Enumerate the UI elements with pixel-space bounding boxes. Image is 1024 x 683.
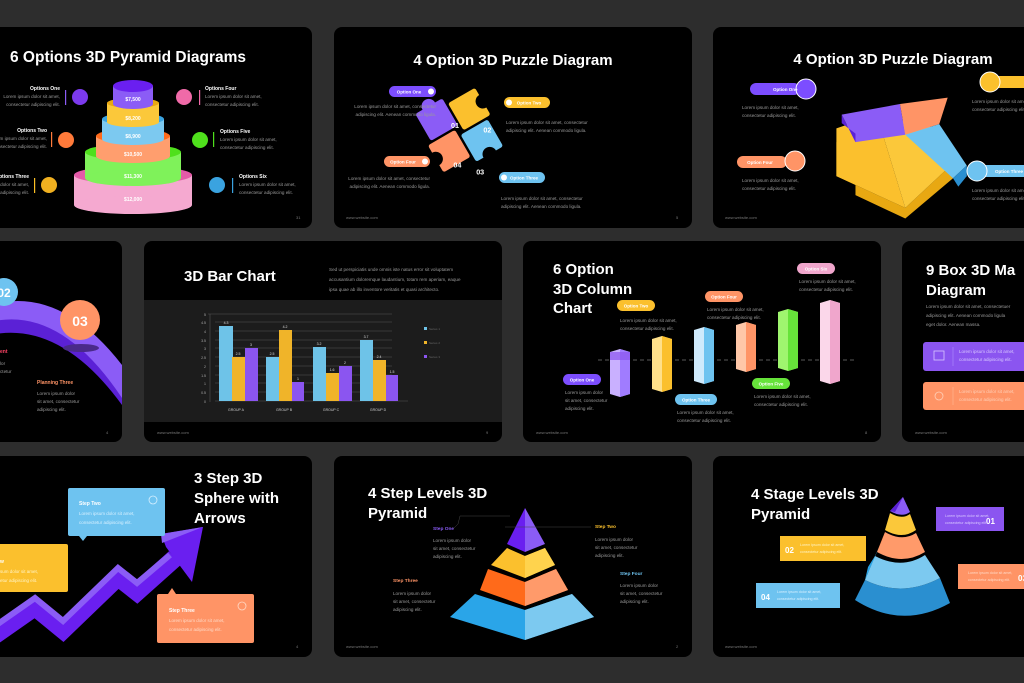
options right: consectetur adipiscing elit. bbox=[205, 102, 259, 107]
bar chart: 3.7 bbox=[364, 335, 368, 339]
option three bbox=[499, 172, 583, 209]
slide: 4 step pyramid: 2 bbox=[676, 644, 679, 649]
option labels: Option Six bbox=[805, 266, 828, 272]
description: eget dolor. Aenean massa. bbox=[926, 322, 980, 327]
title: Pyramid bbox=[368, 505, 427, 522]
option three: Option Three bbox=[995, 169, 1023, 174]
purple box: Lorem ipsum dolor sit amet, bbox=[959, 349, 1015, 354]
step labels: sit amet, consectetur bbox=[393, 599, 436, 604]
step two callout bbox=[68, 488, 165, 541]
slide: 9 box matrix bbox=[902, 241, 1024, 442]
options left: Options One bbox=[30, 86, 60, 92]
title bbox=[926, 262, 1016, 299]
slide: 3 step arrows bbox=[0, 456, 312, 657]
stage boxes (behind): Lorem ipsum dolor sit amet, bbox=[945, 514, 989, 518]
puzzle pieces: 03 bbox=[476, 168, 484, 177]
bar chart: 1.5 bbox=[390, 370, 394, 374]
step three callout: Lorem ipsum dolor sit amet, bbox=[169, 618, 225, 623]
title: 4 Stage Levels 3D bbox=[751, 486, 879, 503]
options left: dolor sit amet, bbox=[0, 182, 29, 187]
description bbox=[329, 267, 461, 292]
option two: adipiscing elit. Aenean commodo ligula. bbox=[506, 128, 586, 133]
options left: consectetur adipiscing elit. bbox=[6, 102, 60, 107]
title: 3D Bar Chart bbox=[184, 268, 276, 285]
slide: 4 stage cone pyramid: www.website.com bbox=[725, 644, 757, 649]
option one: consectetur adipiscing elit. bbox=[742, 113, 796, 118]
cylinder pyramid: $10,500 bbox=[124, 152, 142, 158]
stage boxes (behind): 01 bbox=[986, 517, 995, 526]
title: 4 Option 3D Puzzle Diagram bbox=[793, 51, 993, 68]
description bbox=[926, 304, 1011, 327]
bar chart: 4.3 bbox=[224, 321, 228, 325]
legend: Series 2 bbox=[429, 341, 440, 345]
slide: 3D bar chart bbox=[144, 241, 502, 442]
slide: 6 option column chart: www.website.com bbox=[536, 430, 568, 435]
slide: 6 options pyramid bbox=[0, 27, 312, 228]
step labels: adipiscing elit. bbox=[393, 607, 422, 612]
step labels: Step Three bbox=[393, 578, 418, 584]
title bbox=[368, 485, 487, 522]
options left bbox=[0, 86, 88, 195]
step labels: adipiscing elit. bbox=[433, 554, 462, 559]
bar chart: 0 bbox=[204, 400, 206, 404]
stage boxes (behind): 02 bbox=[785, 546, 794, 555]
option four bbox=[737, 151, 805, 191]
bar chart: 3 bbox=[204, 347, 206, 351]
option labels: consectetur adipiscing elit. bbox=[677, 418, 731, 423]
slide: 4 option puzzle: 5 bbox=[676, 215, 679, 220]
cylinder pyramid: $11,300 bbox=[124, 174, 142, 180]
step two callout: consectetur adipiscing elit. bbox=[79, 520, 132, 525]
planning text: adipiscing elit. bbox=[37, 407, 66, 412]
step two callout: Step Two bbox=[79, 501, 101, 507]
stage boxes (behind): 04 bbox=[761, 593, 770, 602]
title bbox=[553, 261, 632, 317]
description: ipsa quae ab illo inventore veritatis et quasi architecto. bbox=[329, 287, 439, 292]
title: 6 Options 3D Pyramid Diagrams bbox=[10, 49, 246, 66]
options right: Options Six bbox=[239, 174, 267, 180]
slide: 6 option column chart: 8 bbox=[865, 430, 868, 435]
columns bbox=[610, 300, 840, 397]
bar chart: 4.5 bbox=[201, 321, 206, 325]
stage boxes (behind): Lorem ipsum dolor sit amet, bbox=[800, 543, 844, 547]
option three: Option Three bbox=[510, 176, 538, 180]
option one: Lorem ipsum dolor sit amet, bbox=[742, 105, 799, 110]
option labels: Option Five bbox=[759, 382, 784, 386]
slide: 3D bar chart: www.website.com bbox=[157, 430, 189, 435]
stage boxes (behind): consectetur adipiscing elit. bbox=[968, 578, 1010, 582]
option labels: Lorem ipsum dolor sit amet, bbox=[620, 318, 677, 323]
legend: Series 3 bbox=[429, 355, 440, 359]
step labels: adipiscing elit. bbox=[595, 553, 624, 558]
cylinder pyramid bbox=[74, 80, 192, 214]
step labels: Lorem ipsum dolor bbox=[620, 583, 659, 588]
bar chart: 2.5 bbox=[270, 352, 274, 356]
slide: 6 option column chart bbox=[523, 241, 881, 442]
arc band bbox=[0, 315, 122, 405]
stage boxes (behind): consectetur adipiscing elit. bbox=[777, 597, 819, 601]
title bbox=[751, 486, 879, 523]
legend bbox=[424, 327, 440, 359]
options left: Lorem ipsum dolor sit amet, bbox=[3, 94, 60, 99]
bar chart: 2.5 bbox=[201, 356, 206, 360]
option three: Lorem ipsum dolor sit amet, consectetur bbox=[501, 196, 583, 201]
bar chart: 2 bbox=[344, 361, 346, 365]
step labels: Step Four bbox=[620, 571, 643, 577]
planning text: ctetur bbox=[0, 369, 12, 374]
option labels: Lorem ipsum dolor sit amet, bbox=[754, 394, 811, 399]
step one callout: sum dolor sit amet, bbox=[0, 569, 38, 574]
bar chart: 5 bbox=[204, 313, 206, 317]
option one bbox=[354, 86, 436, 117]
circle 03: 03 bbox=[72, 313, 88, 329]
step one callout: w bbox=[0, 559, 4, 565]
option one: Option One bbox=[397, 90, 422, 94]
option three bbox=[967, 161, 1024, 201]
option four: Lorem ipsum dolor sit amet, consectetur bbox=[348, 176, 430, 181]
title: 4 Option 3D Puzzle Diagram bbox=[413, 52, 613, 69]
house puzzle bbox=[836, 98, 967, 218]
option labels: Option Four bbox=[711, 294, 737, 300]
step labels: adipiscing elit. bbox=[620, 599, 649, 604]
step one callout: etur adipiscing elit. bbox=[0, 578, 37, 583]
slide: 4 option puzzle: www.website.com bbox=[346, 215, 378, 220]
cylinder pyramid: $8,900 bbox=[125, 134, 141, 140]
step two callout: Lorem ipsum dolor sit amet, bbox=[79, 511, 135, 516]
slide: planning arc: 4 bbox=[106, 430, 109, 435]
orange box bbox=[923, 382, 1024, 410]
bar chart: 1 bbox=[297, 377, 299, 381]
step three callout: consectetur adipiscing elit. bbox=[169, 627, 222, 632]
options right: Lorem ipsum dolor sit amet, bbox=[205, 94, 262, 99]
slide: 4 option puzzle bbox=[334, 27, 692, 228]
legend: Series 1 bbox=[429, 327, 440, 331]
step labels: Lorem ipsum dolor bbox=[595, 537, 634, 542]
slide: 3 step arrows: 4 bbox=[296, 644, 299, 649]
option labels: Option One bbox=[570, 378, 595, 382]
title: Sphere with bbox=[194, 490, 279, 507]
option four: Option Four bbox=[390, 160, 416, 164]
option labels: Lorem ipsum dolor sit amet, bbox=[677, 410, 734, 415]
options right: Lorem ipsum dolor sit amet, bbox=[220, 137, 277, 142]
bar chart: GROUP B bbox=[276, 408, 293, 412]
step labels: Step Two bbox=[595, 524, 616, 530]
title: Arrows bbox=[194, 510, 246, 527]
stage boxes (behind): Lorem ipsum dolor sit amet, bbox=[968, 571, 1012, 575]
option labels: consectetur adipiscing elit. bbox=[620, 326, 674, 331]
bar chart: 2.4 bbox=[377, 355, 381, 359]
slide: 4 step pyramid: www.website.com bbox=[346, 644, 378, 649]
option labels: Lorem ipsum dolor sit amet, bbox=[799, 279, 856, 284]
option labels: Option Three bbox=[682, 398, 710, 402]
bar chart: 1.6 bbox=[330, 368, 334, 372]
option four: consectetur adipiscing elit. bbox=[742, 186, 796, 191]
puzzle pieces: 01 bbox=[451, 121, 459, 130]
purple box bbox=[923, 342, 1024, 371]
options left: adipiscing elit. bbox=[0, 190, 29, 195]
title: 6 Option bbox=[553, 261, 614, 278]
circle 02 bbox=[0, 278, 18, 306]
bar chart: GROUP C bbox=[323, 408, 340, 412]
stage boxes (behind): Lorem ipsum dolor sit amet, bbox=[777, 590, 821, 594]
option labels: consectetur adipiscing elit. bbox=[799, 287, 853, 292]
cone bbox=[855, 497, 950, 616]
stage boxes (behind): consectetur adipiscing elit. bbox=[945, 521, 987, 525]
slide: 4 stage cone pyramid bbox=[713, 456, 1024, 657]
slide: 4 step pyramid bbox=[334, 456, 692, 657]
pyramid bbox=[450, 508, 594, 640]
bar chart: 4 bbox=[204, 330, 206, 334]
option labels: sit amet, consectetur bbox=[565, 398, 608, 403]
cylinder pyramid: $7,500 bbox=[125, 97, 141, 103]
bar chart: 0.5 bbox=[201, 391, 206, 395]
step labels: Lorem ipsum dolor bbox=[433, 538, 472, 543]
step labels: sit amet, consectetur bbox=[595, 545, 638, 550]
option labels: Option Two bbox=[624, 304, 648, 308]
slide: planning arc bbox=[0, 241, 122, 442]
option four: Option Four bbox=[747, 160, 773, 165]
orange box: consectetur adipiscing elit. bbox=[959, 397, 1012, 402]
bar chart: 2 bbox=[204, 365, 206, 369]
bar chart: GROUP D bbox=[370, 408, 387, 412]
slide: 6 options pyramid: 31 bbox=[296, 215, 301, 220]
options right: Lorem ipsum dolor sit amet, bbox=[239, 182, 296, 187]
option labels: consectetur adipiscing elit. bbox=[754, 402, 808, 407]
description: accusantium doloremque laudantium, totam rem aperiam, eaque bbox=[329, 277, 461, 282]
circle 03 bbox=[60, 300, 100, 352]
step labels bbox=[393, 516, 663, 612]
option one: Lorem ipsum dolor sit amet, consectetur bbox=[354, 104, 436, 109]
title: Diagram bbox=[926, 282, 986, 299]
option two bbox=[504, 97, 588, 133]
slide: 9 box matrix: www.website.com bbox=[915, 430, 947, 435]
planning text: ent bbox=[0, 349, 8, 355]
cylinder pyramid: $12,000 bbox=[124, 197, 142, 203]
purple box: consectetur adipiscing elit. bbox=[959, 357, 1012, 362]
option two bbox=[972, 72, 1024, 112]
bar chart: 3.5 bbox=[201, 339, 206, 343]
bar chart: GROUP A bbox=[228, 408, 245, 412]
bar chart bbox=[201, 313, 408, 412]
step one callout bbox=[0, 544, 68, 592]
option labels: adipiscing elit. bbox=[565, 406, 594, 411]
step labels: sit amet, consectetur bbox=[433, 546, 476, 551]
options right: Options Five bbox=[220, 129, 250, 135]
orange box: Lorem ipsum dolor sit amet, bbox=[959, 389, 1015, 394]
option labels: consectetur adipiscing elit. bbox=[707, 315, 761, 320]
stage boxes (behind): consectetur adipiscing elit. bbox=[800, 550, 842, 554]
option two: Lorem ipsum dolor sit amet, consectetur bbox=[506, 120, 588, 125]
option four: Lorem ipsum dolor sit amet, bbox=[742, 178, 799, 183]
option labels: Lorem ipsum dolor sit amet, bbox=[707, 307, 764, 312]
title bbox=[194, 470, 279, 527]
description: Lorem ipsum dolor sit amet, consectetuer bbox=[926, 304, 1011, 309]
description: adipiscing elit. Aenean commodo ligula bbox=[926, 313, 1006, 318]
bar chart: 3.2 bbox=[317, 342, 321, 346]
title: 3D Column bbox=[553, 281, 632, 298]
bar chart: 2.5 bbox=[236, 352, 240, 356]
planning text: Lorem ipsum dolor bbox=[37, 391, 76, 396]
step labels: Lorem ipsum dolor bbox=[393, 591, 432, 596]
bar chart: 1 bbox=[204, 382, 206, 386]
step three callout bbox=[157, 588, 254, 643]
slide: puzzle house: www.website.com bbox=[725, 215, 757, 220]
puzzle pieces: 04 bbox=[453, 160, 461, 169]
puzzle pieces bbox=[401, 72, 517, 189]
title: Pyramid bbox=[751, 506, 810, 523]
bar chart: 3 bbox=[250, 343, 252, 347]
bar chart: 1.5 bbox=[201, 374, 206, 378]
step labels: Step One bbox=[433, 526, 454, 532]
title: 9 Box 3D Ma bbox=[926, 262, 1016, 279]
description: Sed ut perspiciatis unde omnis iste natus error sit voluptatem bbox=[329, 267, 453, 272]
planning text: lor bbox=[0, 361, 6, 366]
step labels: sit amet, consectetur bbox=[620, 591, 663, 596]
option one: Option One bbox=[773, 87, 798, 92]
option labels: Lorem ipsum dolor bbox=[565, 390, 604, 395]
option three: adipiscing elit. Aenean commodo ligula. bbox=[501, 204, 581, 209]
options left: Options Two bbox=[17, 128, 47, 134]
planning text bbox=[0, 349, 80, 412]
slide: 3D bar chart: 9 bbox=[486, 430, 489, 435]
zigzag arrow bbox=[0, 527, 203, 635]
option four: adipiscing elit. Aenean commodo ligula. bbox=[350, 184, 430, 189]
puzzle pieces: 02 bbox=[483, 126, 491, 135]
planning text: sit amet, consectetur bbox=[37, 399, 80, 404]
options right: consectetur adipiscing elit. bbox=[220, 145, 274, 150]
options right: Options Four bbox=[205, 86, 236, 92]
title: Chart bbox=[553, 300, 592, 317]
planning text: Planning Three bbox=[37, 380, 73, 386]
slide: puzzle house bbox=[713, 27, 1024, 228]
stage boxes (behind) bbox=[756, 507, 1024, 608]
options right bbox=[176, 86, 296, 195]
title: 3 Step 3D bbox=[194, 470, 263, 487]
option two: Option Two bbox=[517, 100, 541, 106]
cylinder pyramid: $8,200 bbox=[125, 116, 141, 122]
option one bbox=[742, 79, 816, 118]
option labels bbox=[563, 263, 856, 423]
option four bbox=[348, 156, 430, 189]
options right: consectetur adipiscing elit. bbox=[239, 190, 293, 195]
bar chart: 4.2 bbox=[283, 325, 287, 329]
option one: adipiscing elit. Aenean commodo ligula. bbox=[356, 112, 436, 117]
title: 4 Step Levels 3D bbox=[368, 485, 487, 502]
step three callout: Step Three bbox=[169, 608, 195, 614]
